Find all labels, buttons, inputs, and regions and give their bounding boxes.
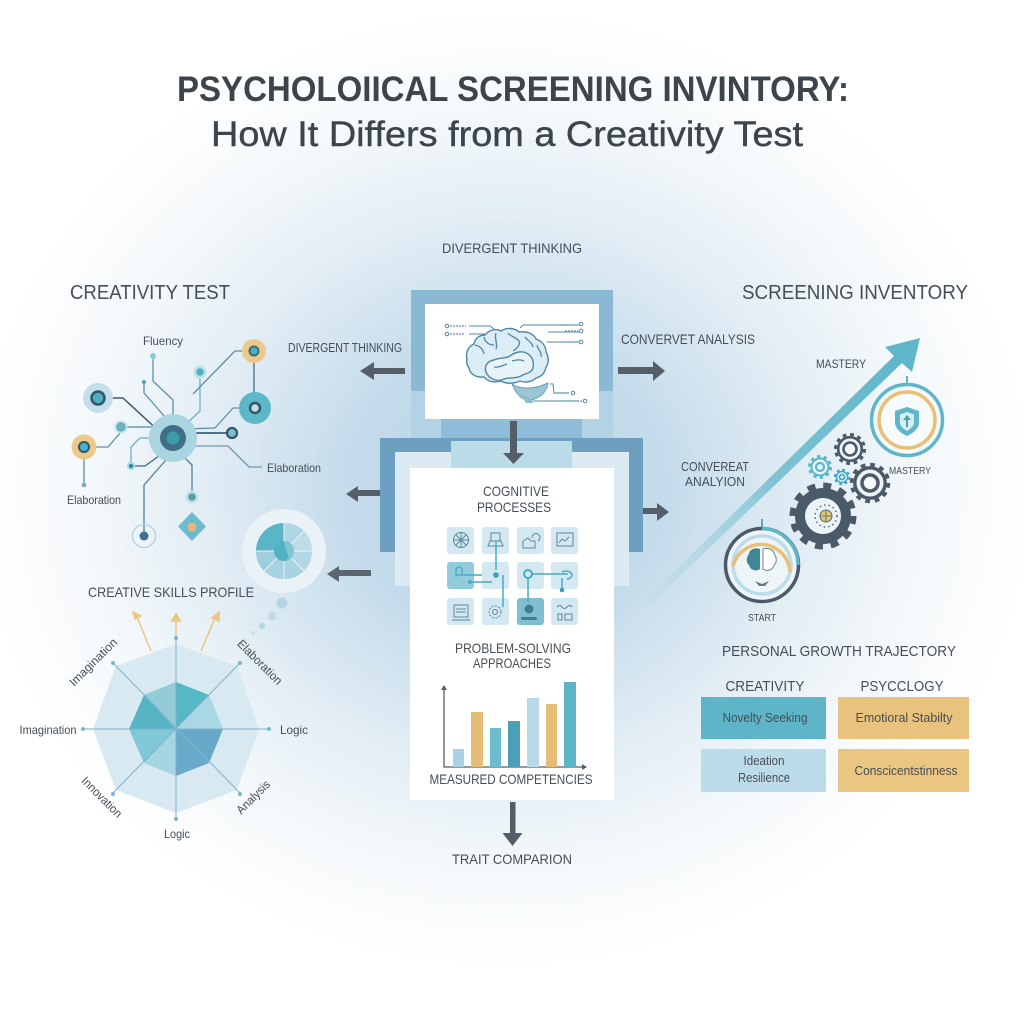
panel: top brain frame [411,290,613,442]
icon grid: cognitive processes [447,527,578,625]
decorative bubbles trail [251,598,288,635]
arrow: divergent left [360,362,405,380]
radar labels: Logic [164,827,190,841]
label: convereat analyion: CONVEREAT [681,459,749,474]
arrow: frame right [643,503,669,521]
icon: start badge [726,519,798,602]
radar labels: Imagination [20,723,76,737]
radar labels: Analysis [233,777,273,817]
card: ideation resilience: Resilience [738,771,790,785]
label: convereat analyion [681,459,749,489]
radar labels: Elaboration [234,637,285,688]
card heading: problem-solving approaches: APPROACHES [473,655,551,671]
icon: magnified pie chart [242,509,326,593]
card: ideation resilience [701,749,826,792]
card heading: cognitive processes: COGNITIVE [483,483,549,499]
label: measured competencies: MEASURED COMPETENCIES [430,771,592,787]
label: convervet analysis: CONVERVET ANALYSIS [621,331,755,347]
heading: personal growth trajectory: PERSONAL GROWTH TRAJECTORY [722,643,956,660]
label: fluency: Fluency [143,334,183,348]
label: divergent thinking: DIVERGENT THINKING [288,340,402,355]
arrow: top center down [503,421,524,464]
card: conscientiousness: Conscicentstinness [854,764,958,778]
network diagram: creativity test [72,339,271,548]
arrows: gold upward [133,612,219,651]
card: emotional stability: Emotioral Stabilty [856,711,953,725]
card heading: cognitive processes: PROCESSES [477,499,551,515]
radar labels: Imagination [66,635,120,689]
gears [792,434,888,546]
radar labels [20,635,308,841]
icon: brain [445,322,587,403]
table: creativity vs psychology [701,678,969,792]
column heading: psycclogy: PSYCCLOGY [860,678,944,695]
heading: screening inventory: SCREENING INVENTORY [742,282,968,304]
arrow: growth trajectory [645,338,920,605]
label: mastery bottom: MASTERY [889,466,931,477]
card: conscientiousness [838,749,969,792]
bar chart: measured competencies [441,682,587,770]
arrow: frame left [346,486,380,502]
title: PSYCHOLOIICAL SCREENING INVINTORY: [177,70,849,109]
heading: creativity test: CREATIVITY TEST [70,282,230,304]
card heading: cognitive processes [477,483,551,515]
column heading: creativity: CREATIVITY [726,678,804,695]
radar chart: creative skills [82,636,270,820]
heading: creative skills profile: CREATIVE SKILLS PROFILE [88,584,254,600]
arrow: to pie left [327,566,371,582]
card heading: problem-solving approaches [455,640,571,671]
card heading: problem-solving approaches: PROBLEM-SOLVING [455,640,571,656]
arrow: card bottom down [502,802,522,846]
heading: divergent thinking top: DIVERGENT THINKING [442,240,582,256]
label: mastery top: MASTERY [816,357,866,371]
card: novelty seeking: Novelty Seeking [722,711,808,725]
label: elaboration right: Elaboration [267,461,321,475]
panel: center white card [410,468,614,800]
card: emotional stability [838,697,969,739]
label: trait comparion: TRAIT COMPARION [452,851,572,867]
label: elaboration left: Elaboration [67,493,121,507]
label: start: START [748,613,776,624]
radar labels: Innovation [78,774,125,821]
icon: mastery badge [872,376,942,456]
title [177,70,849,154]
card: novelty seeking [701,697,826,739]
panel: second frame behind cards [380,438,643,586]
card: ideation resilience: Ideation [744,754,785,768]
radar data shape [129,682,223,776]
radar labels: Logic [280,723,308,737]
label: convereat analyion: ANALYION [685,474,745,489]
arrow: convergent right [618,361,665,381]
title: How It Differs from a Creativity Test [211,115,803,154]
